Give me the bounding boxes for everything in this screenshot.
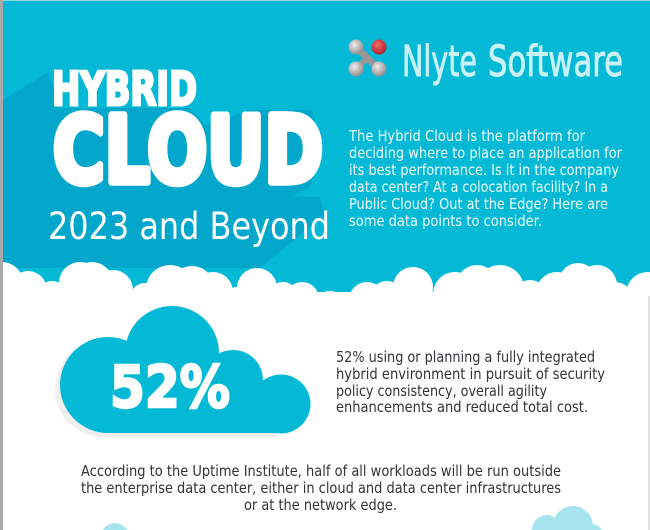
stat description: [336, 348, 605, 416]
intro text: some data points to consider.: [349, 212, 542, 230]
left page edge: [0, 0, 3, 530]
logo icon: [348, 40, 386, 76]
subtitle: 2023 and Beyond: [48, 205, 330, 248]
right page edge: [648, 296, 650, 530]
logo wordmark: [402, 37, 623, 87]
stat description: 52% using or planning a fully integrated: [336, 348, 595, 366]
title: Hybrid: HYBRID: [52, 62, 197, 116]
top page edge: [0, 0, 650, 1]
intro text: The Hybrid Cloud is the platform for: [348, 127, 586, 145]
cloud stat: 52%: [55, 306, 310, 437]
stat value: 52%: [110, 353, 230, 421]
Uptime Institute text: the enterprise data center, either in cloud and data center infrastructures: [81, 479, 561, 497]
small cloud right: [532, 506, 603, 530]
Uptime Institute text: [81, 462, 561, 514]
panel: header background: [0, 0, 650, 300]
stat description: hybrid environment in pursuit of security: [336, 365, 605, 383]
logo wordmark: Nlyte: [402, 37, 477, 87]
small cloud left: [101, 523, 129, 530]
intro text: [348, 127, 623, 230]
Uptime Institute text: According to the Uptime Institute, half of all workloads will be run outside: [81, 462, 561, 480]
stat description: enhancements and reduced total cost.: [336, 398, 588, 416]
title: Cloud: CLOUD: [53, 97, 323, 204]
stat description: policy consistency, overall agility: [336, 382, 547, 400]
Uptime Institute text: or at the network edge.: [244, 496, 397, 514]
long shadow behind title: [3, 72, 325, 268]
cloud edge: [0, 262, 650, 530]
